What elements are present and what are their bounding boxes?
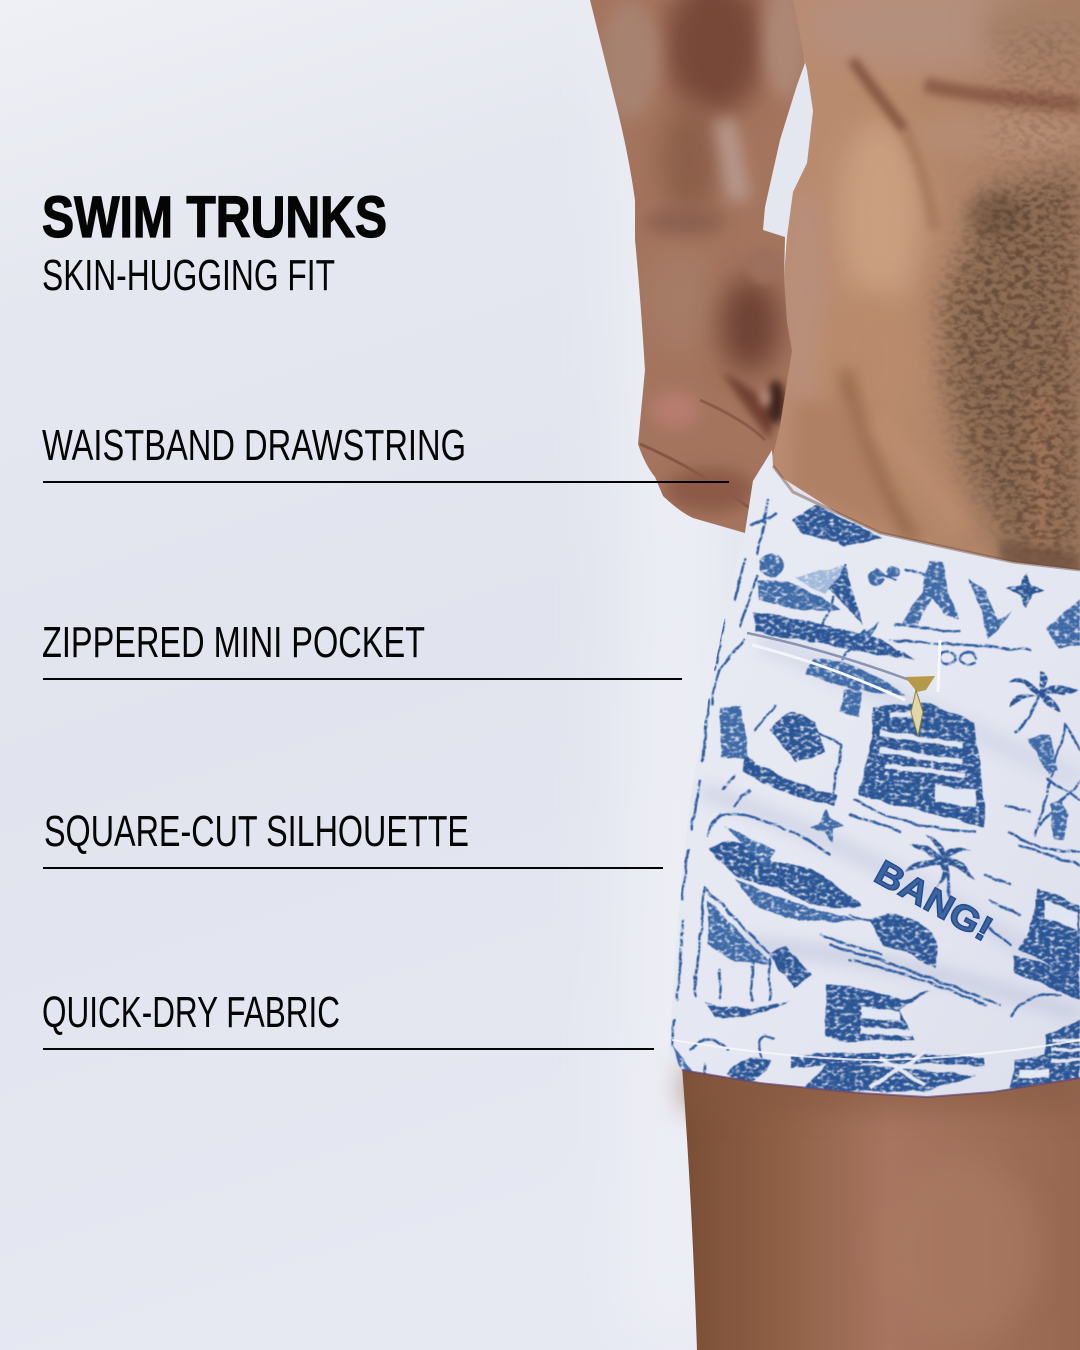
print group xyxy=(672,500,1080,1092)
pocket and zipper xyxy=(747,633,940,736)
feature: zippered mini pocket: ZIPPERED MINI POCKET xyxy=(42,618,425,667)
print: side seam motifs xyxy=(672,620,725,1045)
waistband edge shadow xyxy=(773,466,1080,570)
print: volleyball net xyxy=(695,888,812,1017)
fabric folds xyxy=(700,640,1080,1015)
photo: model thigh xyxy=(682,1066,1080,1350)
title: SWIM TRUNKS xyxy=(42,185,387,250)
print: art deco hotel and car xyxy=(850,703,985,832)
print: windsurfer sail xyxy=(1005,725,1080,865)
feature: waistband drawstring: WAISTBAND DRAWSTRING xyxy=(42,421,466,470)
print: surf wave xyxy=(706,814,862,922)
feature: quick-dry fabric: QUICK-DRY FABRIC xyxy=(42,988,340,1037)
print: starfish xyxy=(1005,573,1045,608)
print: palm tree xyxy=(1008,672,1078,732)
print: palm trees centre xyxy=(905,834,975,897)
print: BANG! comic lettering: BANG! xyxy=(868,853,999,949)
print: right sail top xyxy=(1045,600,1080,648)
hem shadow xyxy=(682,1070,1080,1097)
print: boat at waistband xyxy=(735,500,882,625)
print: figures on the beach xyxy=(868,560,1030,650)
print: small starfish xyxy=(810,810,845,843)
print: lifeguard tower right xyxy=(985,875,1080,1000)
print: palm by pocket xyxy=(806,622,976,718)
print: flamingo bird xyxy=(672,1035,773,1084)
print: beach house right xyxy=(1010,994,1080,1090)
subtitle: SKIN-HUGGING FIT xyxy=(42,251,335,300)
print: bush and shoreline xyxy=(820,914,1000,1005)
print: lifeguard station xyxy=(790,985,985,1092)
print: beach umbrella xyxy=(752,553,915,660)
photo: model arm and hand xyxy=(590,0,807,533)
swim trunks with toile print xyxy=(669,450,1080,1097)
hem stitching xyxy=(672,1040,1080,1060)
photo: model torso xyxy=(770,0,1080,590)
print: people on deck scene xyxy=(712,640,842,825)
feature: square-cut silhouette: SQUARE-CUT SILHOUETTE xyxy=(44,807,469,856)
